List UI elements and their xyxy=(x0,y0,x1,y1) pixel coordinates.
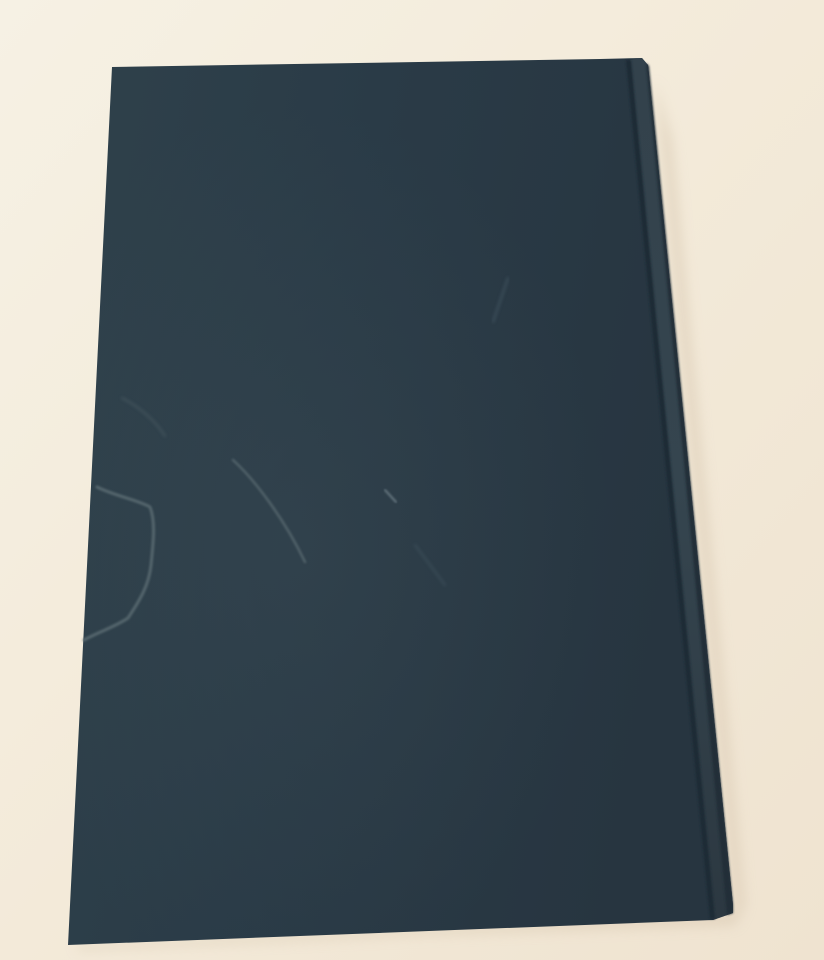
scuff marks on cover xyxy=(84,278,508,640)
cover light patch xyxy=(68,60,709,945)
diagonal scratch xyxy=(233,460,305,562)
spine outer edge shading xyxy=(646,63,733,915)
faint diagonal xyxy=(415,545,445,585)
book cover panel xyxy=(68,58,733,945)
book spine hinge band xyxy=(630,58,733,920)
upper scratch xyxy=(493,278,508,322)
spine groove xyxy=(626,60,715,919)
short scratch xyxy=(385,490,396,502)
faint arc xyxy=(122,398,165,436)
crescent scuff xyxy=(84,487,154,640)
shadow: book on table xyxy=(75,80,745,950)
book: back cover photo xyxy=(68,58,733,945)
